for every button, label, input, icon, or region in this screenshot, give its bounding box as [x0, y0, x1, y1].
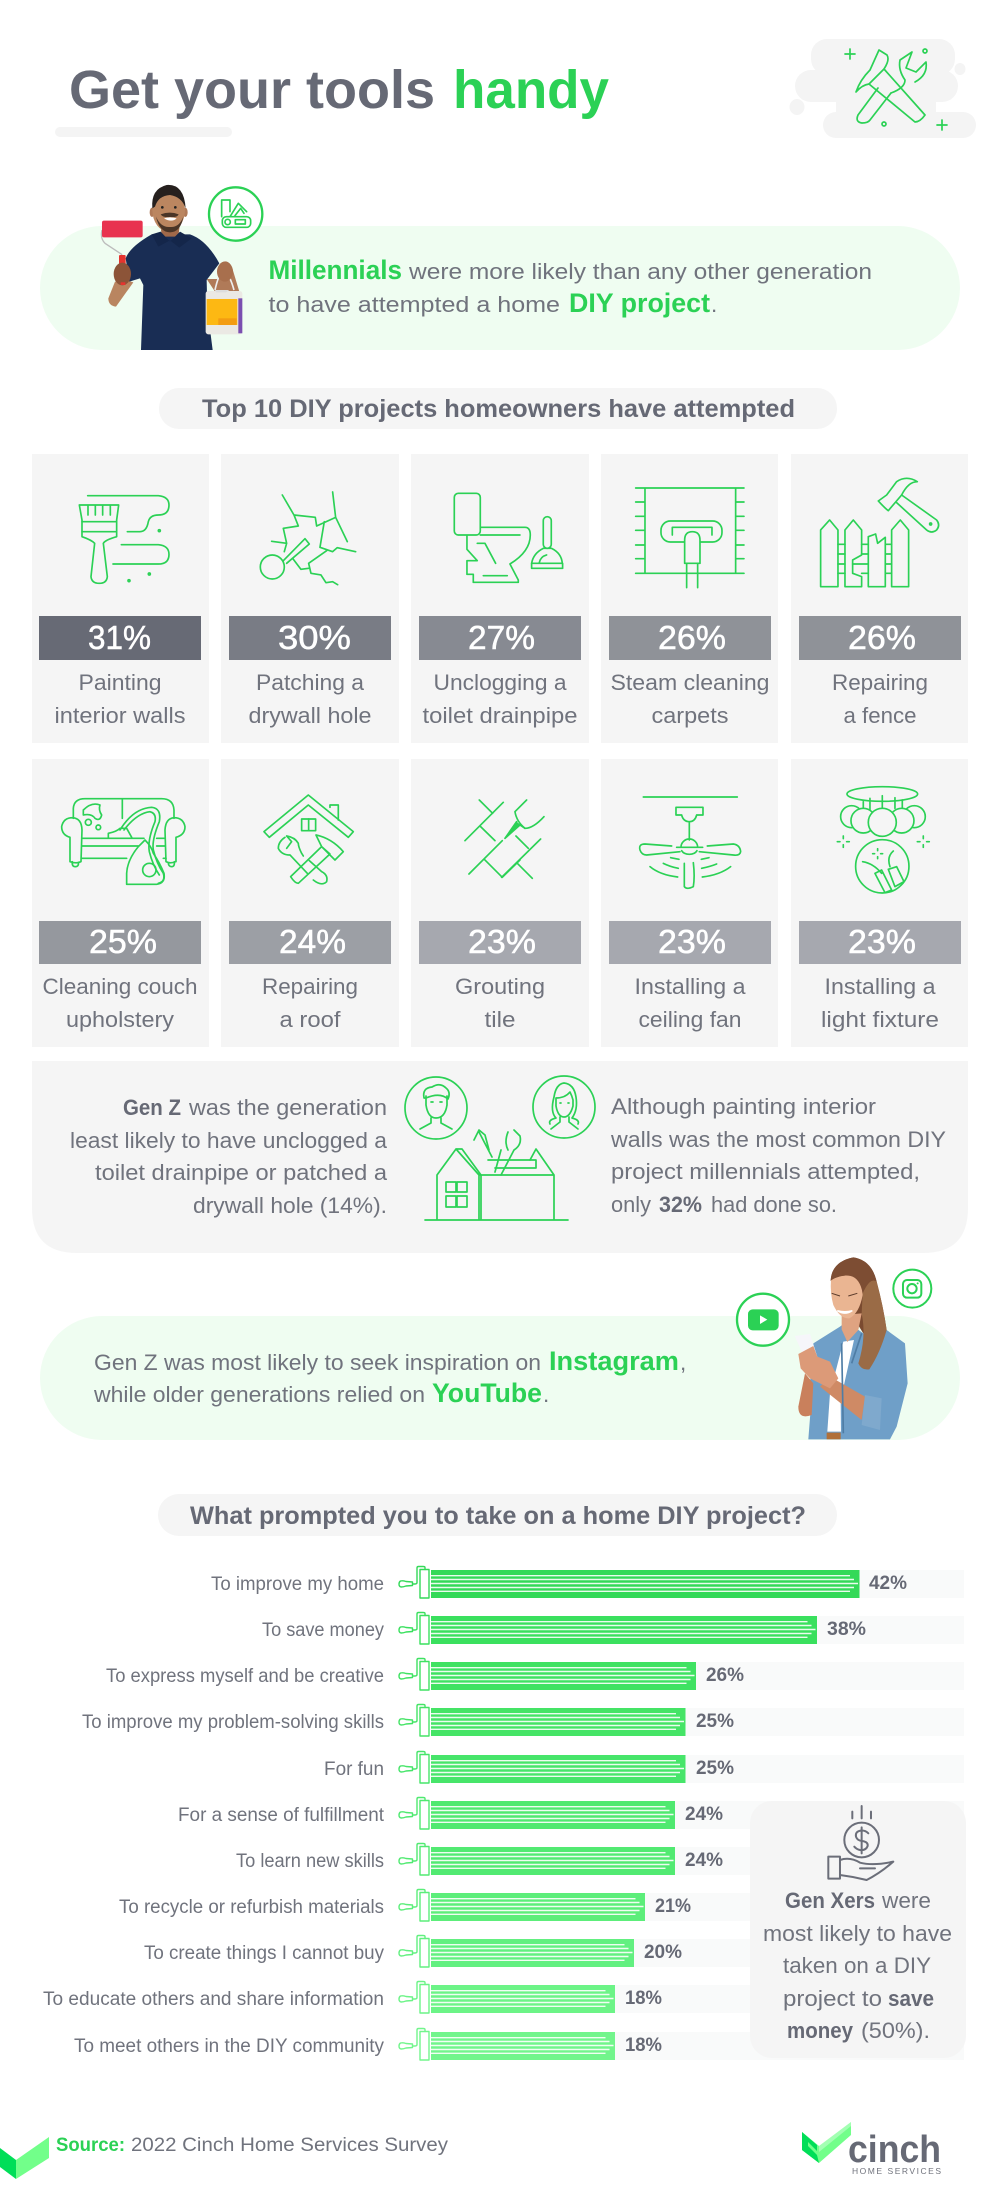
- text: millennials statement: [268, 255, 872, 318]
- label: patching a drywall hole: drywall hole: [248, 703, 372, 728]
- text: gen z insight: was the generation: [188, 1095, 387, 1120]
- text: gen z insight: drywall hole (14%).: [193, 1193, 387, 1218]
- label: repairing a roof: Repairing: [262, 974, 358, 999]
- heading: what prompted you: What prompted you to take on a home DIY project?: [190, 1502, 806, 1530]
- card: painting interior walls: [32, 454, 209, 743]
- row: educate others 18%: 18%: [625, 1988, 662, 2009]
- icon: paint brush: [79, 496, 169, 583]
- row: to save money 38%: 38%: [827, 1619, 866, 1640]
- label: installing a ceiling fan: [634, 974, 746, 1032]
- text: gen xers statement: taken on a DIY: [783, 1953, 931, 1978]
- stat bar: 24%: 24%: [279, 923, 346, 960]
- icon: broken fence and hammer: [821, 478, 939, 587]
- row: problem-solving skills 25%: 25%: [696, 1711, 734, 1732]
- row: for fun 25%: [324, 1752, 964, 1783]
- text: painting insight: [610, 1094, 946, 1217]
- row: to save money 38%: [262, 1612, 964, 1644]
- text: painting insight: had done so.: [711, 1192, 837, 1217]
- text: gen xers statement: [763, 1888, 952, 2043]
- label: painting interior walls: interior walls: [54, 703, 186, 728]
- icon: coin over open hand: [828, 1806, 893, 1880]
- logo: cinch home services: [802, 2122, 941, 2176]
- text: painting insight: only: [611, 1192, 652, 1217]
- label: painting interior walls: [54, 670, 186, 728]
- text: painting insight: walls was the most common DIY: [610, 1127, 946, 1152]
- icon: tile grout: [465, 800, 544, 878]
- stat bar: 24%: [229, 921, 391, 964]
- row: educate others 18%: [43, 1982, 964, 2013]
- icon: paint swatch circle: [209, 187, 262, 241]
- title: Get your tools: [69, 60, 435, 120]
- card: installing a ceiling fan: [601, 759, 778, 1047]
- photo: woman looking at phone: [795, 1257, 908, 1439]
- text: gen z insight: least likely to have unclogged a: [70, 1128, 387, 1153]
- text: painting insight: Although painting interior: [611, 1094, 877, 1119]
- logo: cinch home services: cinch: [848, 2129, 941, 2171]
- row: sense of fulfillment 24%: [178, 1798, 964, 1829]
- label: steam cleaning carpets: Steam cleaning: [610, 670, 770, 695]
- text: instagram and youtube statement: ,: [680, 1350, 686, 1375]
- row: learn new skills 24%: [236, 1844, 964, 1875]
- icon: chandelier and hands: [837, 787, 929, 893]
- stat bar: 23%: [609, 921, 771, 964]
- row: recycle materials 21%: To recycle or refurbish materials: [119, 1897, 384, 1918]
- label: installing a light fixture: Installing a: [824, 974, 936, 999]
- stat bar: 23%: [799, 921, 961, 964]
- text: painting insight: 32%: [659, 1192, 702, 1217]
- label: unclogging a toilet drainpipe: [422, 670, 578, 728]
- stat bar: 23%: 23%: [658, 923, 726, 960]
- bar chart: reasons for DIY: [43, 1566, 964, 2060]
- text: gen xers statement: project to: [783, 1986, 882, 2011]
- icon: man in circle: [405, 1077, 467, 1139]
- row: to improve my home 42%: 42%: [869, 1573, 907, 1594]
- text: instagram and youtube statement: .: [543, 1382, 549, 1407]
- label: unclogging a toilet drainpipe: Unclogging a: [434, 670, 567, 695]
- panel: gen xers callout: [750, 1801, 966, 2058]
- icon: carpet steam cleaner: [636, 488, 744, 588]
- row: sense of fulfillment 24%: For a sense of fulfillment: [178, 1805, 385, 1826]
- label: installing a light fixture: [821, 974, 939, 1032]
- stat bar: 30%: [229, 616, 391, 660]
- icon: house with crossed tools: [264, 795, 353, 884]
- card: repairing a roof: [221, 759, 399, 1047]
- icon: woman in circle: [533, 1076, 595, 1138]
- label: repairing a fence: a fence: [844, 703, 916, 728]
- row: for fun 25%: 25%: [696, 1758, 734, 1779]
- label: installing a ceiling fan: Installing a: [634, 974, 746, 999]
- panel: gen z and painting insights: [32, 1061, 968, 1253]
- panel: social inspiration callout: [40, 1316, 960, 1440]
- row: recycle materials 21%: 21%: [655, 1896, 691, 1917]
- icon: cracked wall with mallet: [260, 492, 356, 585]
- text: millennials statement: were more likely than any other generation: [408, 259, 872, 284]
- photo: man holding paint roller and paint can: [101, 185, 242, 350]
- label: installing a ceiling fan: ceiling fan: [638, 1007, 742, 1032]
- source note: 2022 Cinch Home Services Survey: [131, 2135, 449, 2156]
- text: painting insight: project millennials attempted,: [611, 1159, 920, 1184]
- text: gen xers statement: (50%).: [861, 2018, 930, 2043]
- text: millennials statement: DIY project: [569, 288, 710, 318]
- text: instagram and youtube statement: while older generations relied on: [93, 1382, 425, 1407]
- row: to improve my home 42%: To improve my home: [211, 1574, 384, 1595]
- text: instagram and youtube statement: Gen Z was most likely to seek inspiration on: [94, 1350, 541, 1375]
- text: millennials statement: .: [711, 292, 717, 317]
- text: gen xers statement: were: [881, 1888, 931, 1913]
- card: repairing a fence: [791, 454, 968, 743]
- label: unclogging a toilet drainpipe: toilet drainpipe: [422, 703, 578, 728]
- text: gen z insight: Gen Z: [123, 1095, 181, 1120]
- card: cleaning couch upholstery: [32, 759, 209, 1047]
- row: create things 20%: [144, 1936, 964, 1967]
- card: patching a drywall hole: [221, 454, 399, 743]
- stat bar: 30%: 30%: [278, 619, 351, 656]
- row: DIY community 18%: To meet others in the DIY community: [74, 2036, 384, 2057]
- label: grouting tile: Grouting: [455, 974, 545, 999]
- row: recycle materials 21%: [119, 1890, 964, 1921]
- card: steam cleaning carpets: [601, 454, 778, 743]
- row: create things 20%: 20%: [644, 1942, 682, 1963]
- stat bar: 23%: 23%: [848, 923, 916, 960]
- row: learn new skills 24%: To learn new skills: [236, 1851, 384, 1872]
- icon: house shaped toolbox: [425, 1130, 568, 1220]
- text: instagram and youtube statement: [93, 1346, 686, 1408]
- stat bar: 26%: [609, 616, 771, 660]
- row: create things 20%: To create things I cannot buy: [144, 1943, 384, 1964]
- row: DIY community 18%: [74, 2028, 964, 2060]
- label: patching a drywall hole: Patching a: [256, 670, 365, 695]
- text: millennials statement: to have attempted a home: [268, 292, 560, 317]
- card: unclogging a toilet drainpipe: [411, 454, 589, 743]
- label: installing a light fixture: light fixture: [821, 1007, 939, 1032]
- stat bar: 23%: [419, 921, 581, 964]
- row: problem-solving skills 25%: To improve my problem-solving skills: [82, 1712, 384, 1733]
- label: painting interior walls: Painting: [78, 670, 162, 695]
- text: gen xers statement: money: [787, 2018, 853, 2043]
- text: millennials statement: Millennials: [268, 255, 402, 285]
- row: to save money 38%: To save money: [262, 1620, 384, 1641]
- stat bar: 26%: 26%: [658, 619, 726, 656]
- stat bar: 26%: [799, 616, 961, 660]
- row: to express myself 26%: To express myself and be creative: [106, 1666, 384, 1687]
- stat bar: 27%: [419, 616, 581, 660]
- text: instagram and youtube statement: YouTube: [432, 1378, 542, 1408]
- row: problem-solving skills 25%: [82, 1704, 964, 1736]
- text: gen xers statement: save: [888, 1986, 934, 2011]
- icon: ceiling fan: [640, 797, 741, 888]
- text: gen z insight: toilet drainpipe or patched a: [95, 1160, 387, 1185]
- heading: top 10 DIY projects: [159, 388, 837, 429]
- label: steam cleaning carpets: [610, 670, 770, 728]
- label: cleaning couch upholstery: [42, 974, 198, 1032]
- stat bar: 31%: [39, 616, 201, 660]
- stat bar: 26%: 26%: [848, 619, 916, 656]
- label: grouting tile: [455, 974, 545, 1032]
- label: steam cleaning carpets: carpets: [652, 703, 728, 728]
- stat bar: 25%: 25%: [89, 923, 157, 960]
- row: sense of fulfillment 24%: 24%: [685, 1804, 723, 1825]
- label: repairing a roof: a roof: [280, 1007, 341, 1032]
- logo: cinch home services: HOME SERVICES: [852, 2166, 941, 2176]
- row: to express myself 26%: [106, 1658, 964, 1690]
- label: grouting tile: tile: [484, 1007, 516, 1032]
- text: instagram and youtube statement: Instagram: [549, 1346, 679, 1376]
- row: educate others 18%: To educate others and share information: [43, 1989, 384, 2010]
- title: [69, 60, 609, 120]
- heading: top 10 DIY projects: Top 10 DIY projects homeowners have attempted: [202, 395, 795, 423]
- text: gen xers statement: Gen Xers: [785, 1888, 875, 1913]
- label: cleaning couch upholstery: upholstery: [66, 1007, 174, 1032]
- label: repairing a roof: [262, 974, 358, 1032]
- row: learn new skills 24%: 24%: [685, 1850, 723, 1871]
- icon: toilet and plunger: [454, 493, 563, 582]
- heading: what prompted you: [158, 1494, 837, 1536]
- label: repairing a fence: Repairing: [832, 670, 928, 695]
- icon: instagram circle: [893, 1270, 931, 1308]
- title underline bar: [55, 127, 232, 137]
- label: cleaning couch upholstery: Cleaning couch: [42, 974, 198, 999]
- stat bar: 31%: 31%: [88, 619, 151, 656]
- title: handy: [453, 60, 609, 120]
- panel: millennials callout: [40, 226, 960, 350]
- footer check mark: [0, 2137, 49, 2179]
- stat bar: 27%: 27%: [468, 619, 535, 656]
- stat bar: 25%: [39, 921, 201, 964]
- label: patching a drywall hole: [248, 670, 372, 728]
- row: to express myself 26%: 26%: [706, 1665, 744, 1686]
- stat bar: 23%: 23%: [468, 923, 536, 960]
- card: installing a light fixture: [791, 759, 968, 1047]
- text: gen z insight: [70, 1095, 387, 1218]
- label: repairing a fence: [832, 670, 928, 728]
- row: to improve my home 42%: [211, 1566, 964, 1598]
- icon: youtube circle: [737, 1294, 789, 1346]
- icon: crossed hammer and wrench on grey cloud: [790, 39, 976, 138]
- row: DIY community 18%: 18%: [625, 2035, 662, 2056]
- source note: Source:: [56, 2135, 125, 2156]
- card: grouting tile: [411, 759, 589, 1047]
- icon: couch and vacuum: [62, 799, 185, 884]
- text: gen xers statement: most likely to have: [763, 1921, 952, 1946]
- row: for fun 25%: For fun: [324, 1759, 384, 1780]
